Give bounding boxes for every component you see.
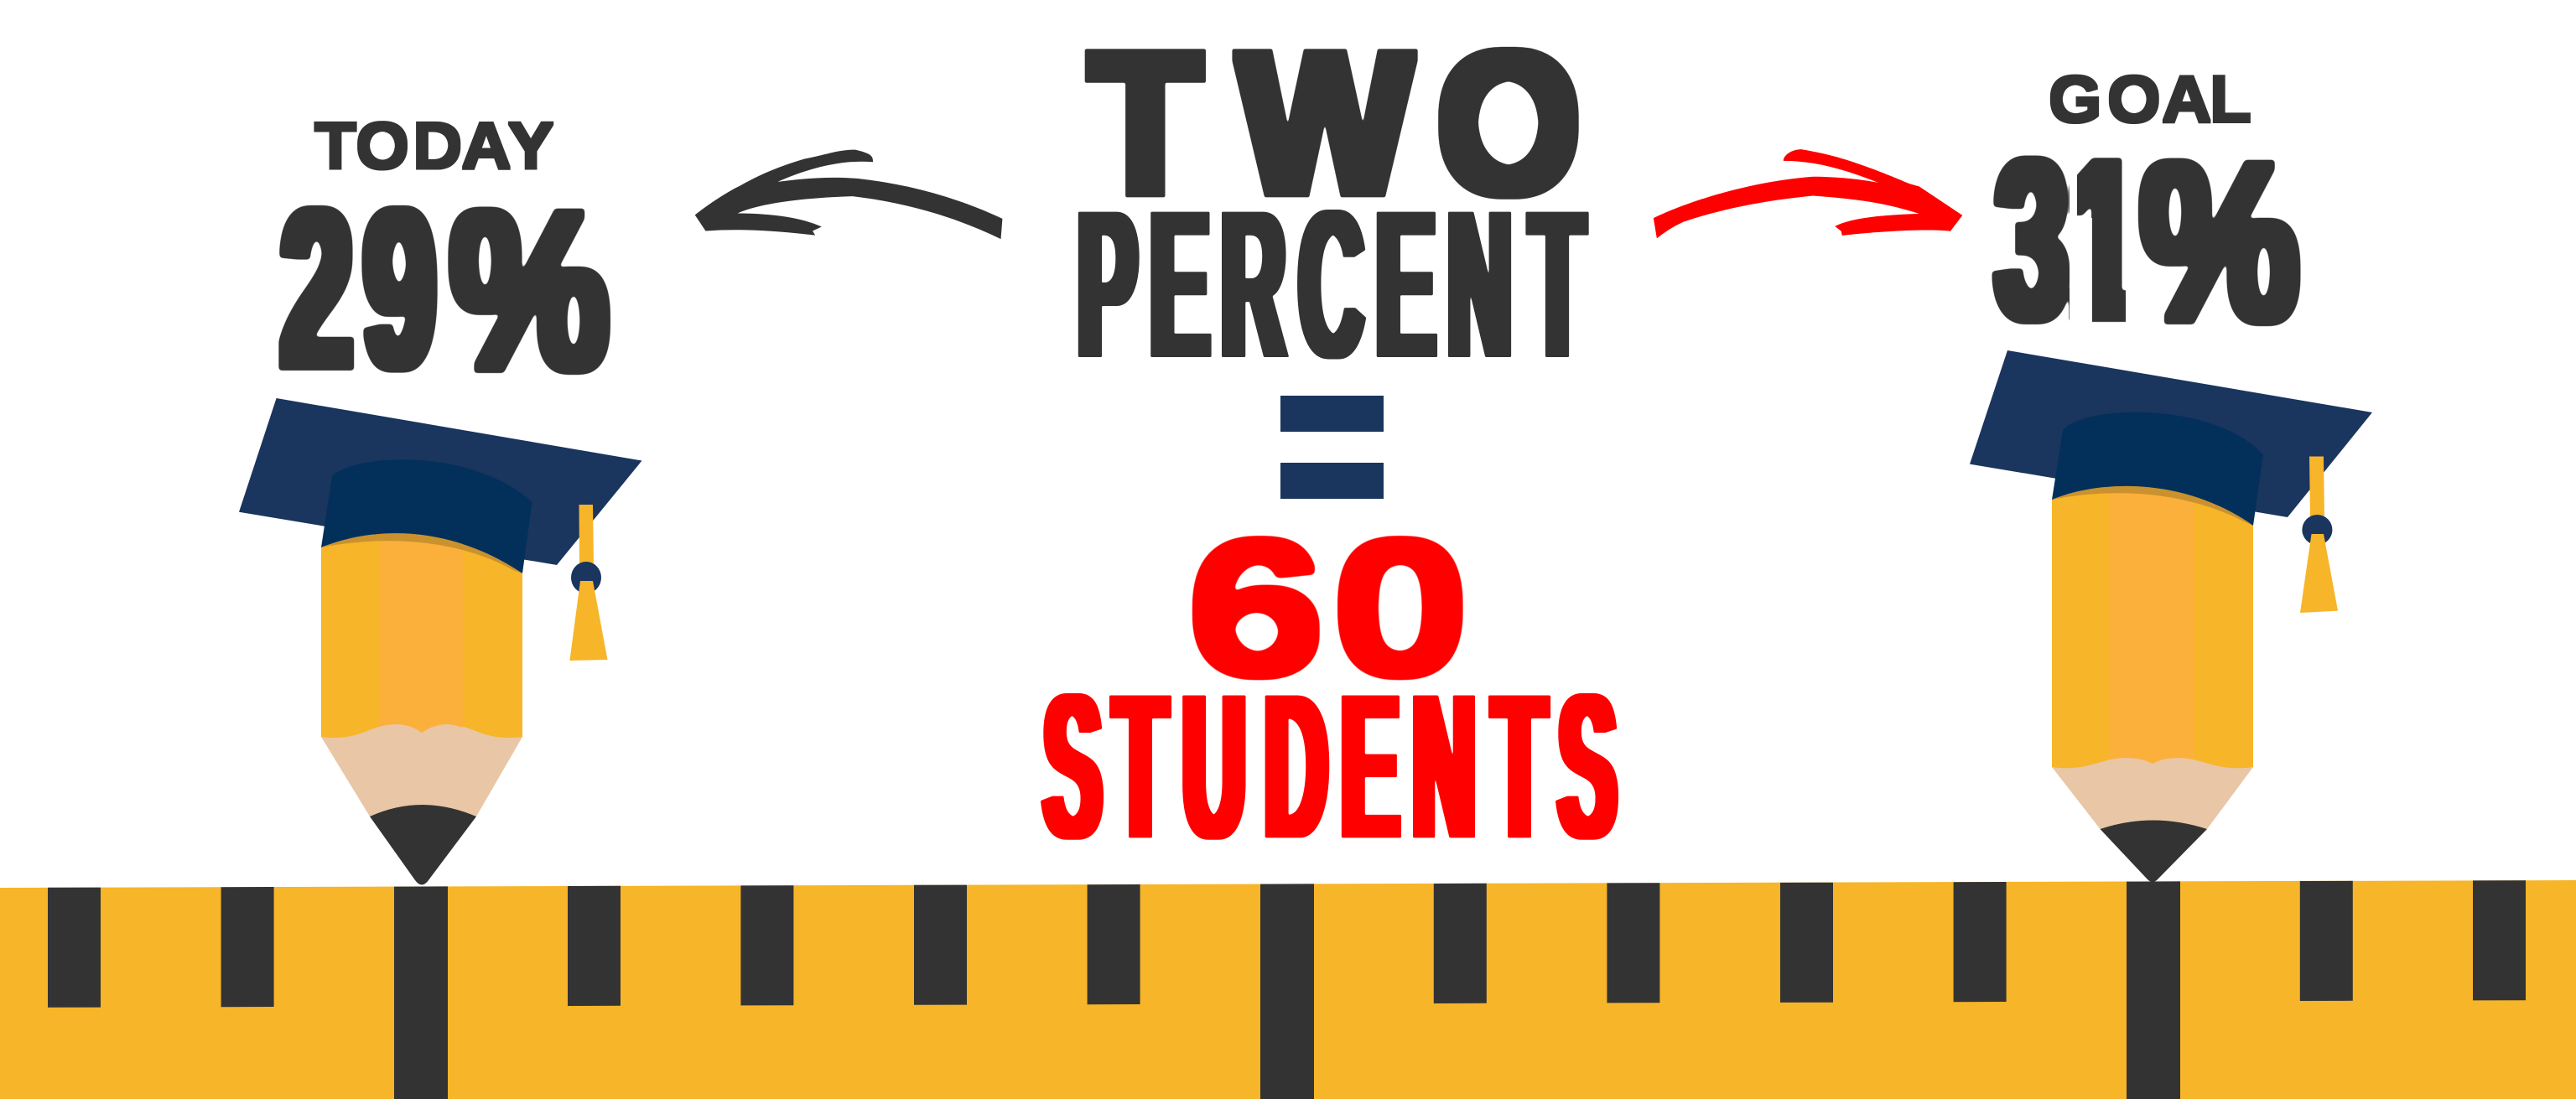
- band shadow: [2052, 486, 2253, 526]
- cap board: [239, 398, 642, 565]
- heading: percent: PERCENT: [1078, 166, 1584, 402]
- arrow: left: [695, 150, 1002, 239]
- cap board: [1970, 350, 2372, 517]
- pencil lead: [2100, 820, 2207, 882]
- tassel knot: [2302, 515, 2332, 545]
- tassel cord: [579, 505, 594, 566]
- tassel: [2300, 534, 2338, 613]
- pencil lead: [370, 805, 476, 885]
- label: goal: GOAL: [2049, 63, 2251, 136]
- stat: 31%: [1992, 155, 2301, 327]
- cap band: [321, 459, 532, 573]
- pencil with graduation cap: goal: [1970, 350, 2372, 882]
- arrow: right: [1654, 149, 1962, 238]
- number: 60: 60: [1187, 501, 1470, 715]
- pencil body: [321, 533, 522, 738]
- stat: 29%: 29: [280, 164, 436, 414]
- pencil wood: [321, 721, 522, 816]
- equals sign: [1280, 396, 1384, 499]
- heading: two: TWO: [1089, 13, 1580, 234]
- cap band: [2052, 412, 2263, 526]
- ruler: [0, 880, 2576, 1099]
- label: today: TODAY: [314, 109, 553, 182]
- band shadow: [321, 533, 522, 573]
- stat: 29%: %: [449, 165, 610, 416]
- pencil body: [2052, 486, 2253, 768]
- pencil wood: [2052, 750, 2253, 829]
- pencil highlight: [2110, 482, 2194, 764]
- heading: students: STUDENTS: [1043, 652, 1617, 883]
- pencil highlight: [380, 528, 463, 733]
- pencil with graduation cap: today: [239, 398, 642, 885]
- stat: 29%: [280, 164, 610, 416]
- tassel cord: [2309, 456, 2324, 520]
- stat: 31%: %: [2140, 117, 2299, 367]
- stat: 31%: 31: [1995, 112, 2140, 365]
- tassel: [569, 581, 607, 661]
- tassel knot: [571, 562, 601, 594]
